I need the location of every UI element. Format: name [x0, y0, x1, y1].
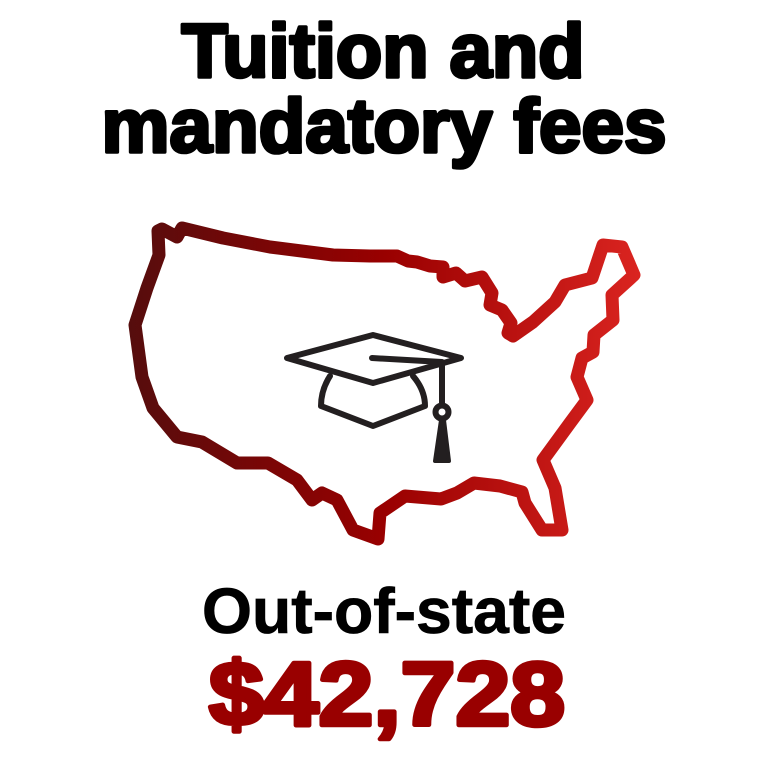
- title: [102, 9, 666, 169]
- cap board: [287, 335, 461, 383]
- map outline of the United States: [135, 228, 634, 539]
- tassel cord: [372, 358, 442, 405]
- subheading: Out-of-state: [202, 575, 566, 647]
- cap base: [321, 376, 425, 426]
- tassel knot: [436, 406, 448, 418]
- title: Tuition and: [182, 9, 584, 94]
- tassel: [435, 420, 449, 461]
- title: mandatory fees: [102, 84, 666, 169]
- icon: graduation cap: [287, 335, 461, 461]
- amount: $42,728: [209, 645, 565, 745]
